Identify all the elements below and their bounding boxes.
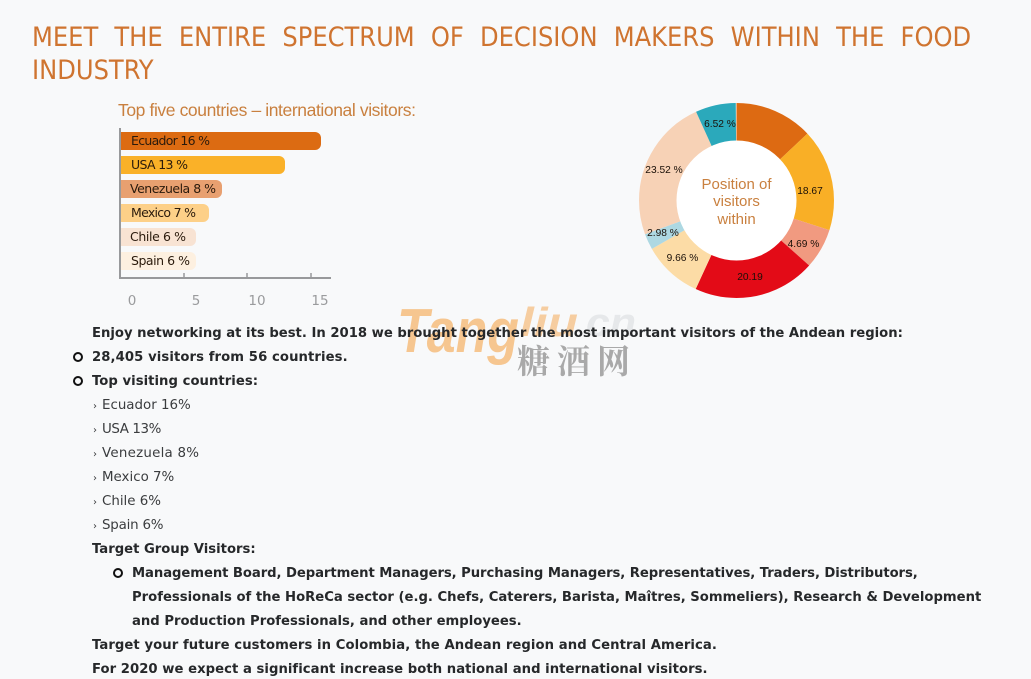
axis labels: 10 [248, 293, 266, 309]
intro text: Enjoy networking at its best. In 2018 we brought together the most important visitors of the Andean region: [92, 326, 903, 341]
bar: Ecuador [120, 132, 321, 150]
closing line 1: Target your future customers in Colombia, the Andean region and Central America. [92, 638, 717, 653]
bar chart: top five countries [118, 100, 416, 309]
donut values [645, 119, 823, 283]
chart heading: Top five countries – international visitors: [118, 100, 416, 120]
title: MEET THE ENTIRE SPECTRUM OF DECISION MAKERS WITHIN THE FOOD [32, 22, 971, 53]
axes [119, 128, 331, 279]
bar: Mexico [120, 204, 209, 222]
donut values: 4.69 % [788, 239, 819, 250]
target group description: and Production Professionals, and other employees. [132, 614, 522, 629]
title [32, 22, 971, 86]
bar: USA: USA 13 % [131, 157, 188, 172]
donut chart: position of visitors within [639, 103, 834, 298]
donut values: 18.67 [797, 186, 823, 197]
axis labels: 0 [128, 293, 136, 309]
donut values: 23.52 % [645, 165, 683, 176]
country list: Venezuela 8% [102, 446, 199, 461]
target group description [113, 566, 981, 629]
target group description: Professionals of the HoReCa sector (e.g. Chefs, Caterers, Barista, Maîtres, Sommeliers), Research & Development [132, 590, 981, 605]
bar: Spain [120, 252, 196, 270]
watermark: liu [520, 300, 578, 345]
bar: USA [120, 156, 285, 174]
axis labels: 5 [192, 293, 200, 309]
bar: Chile [120, 228, 196, 246]
bullet: visitors: 28,405 visitors from 56 countries. [92, 350, 348, 365]
country list: USA 13% [102, 422, 161, 437]
donut segments [658, 122, 815, 279]
country list: › [93, 449, 97, 460]
donut centre label: visitors [713, 193, 760, 210]
donut centre label: Position of [701, 176, 772, 193]
bar: Spain: Spain 6 % [131, 253, 190, 268]
donut centre [676, 140, 796, 260]
axis labels: 15 [311, 293, 329, 309]
watermark: 糖酒网 [517, 336, 637, 382]
watermark [397, 300, 637, 382]
title: INDUSTRY [32, 55, 154, 86]
country list: Ecuador 16% [102, 398, 191, 413]
country list: › [93, 401, 97, 412]
donut values: 2.98 % [647, 228, 679, 239]
country list: Spain 6% [102, 518, 163, 533]
country list: › [93, 425, 97, 436]
country list: Chile 6% [102, 494, 161, 509]
country list: › [93, 473, 97, 484]
target group heading: Target Group Visitors: [92, 542, 256, 557]
axis labels [128, 293, 329, 309]
donut values: 9.66 % [667, 253, 698, 264]
target group description: Management Board, Department Managers, Purchasing Managers, Representatives, Traders, Distributors, [132, 566, 918, 581]
bullet: top visiting countries: Top visiting countries: [92, 374, 258, 389]
bar: Mexico: Mexico 7 % [131, 205, 196, 220]
country list: Mexico 7% [102, 470, 174, 485]
donut centre label [701, 176, 772, 228]
bar: Venezuela: Venezuela 8 % [130, 181, 216, 196]
closing line 2: For 2020 we expect a significant increase both national and international visitors. [92, 662, 708, 677]
donut values: 20.19 [737, 272, 763, 283]
watermark: cn [586, 301, 636, 345]
country list: › [93, 521, 97, 532]
country list: › [93, 497, 97, 508]
bar: Ecuador: Ecuador 16 % [131, 133, 210, 148]
donut centre label: within [716, 211, 756, 228]
bar: Chile: Chile 6 % [130, 229, 186, 244]
country list [93, 398, 199, 533]
donut values: 6.52 % [704, 119, 736, 130]
